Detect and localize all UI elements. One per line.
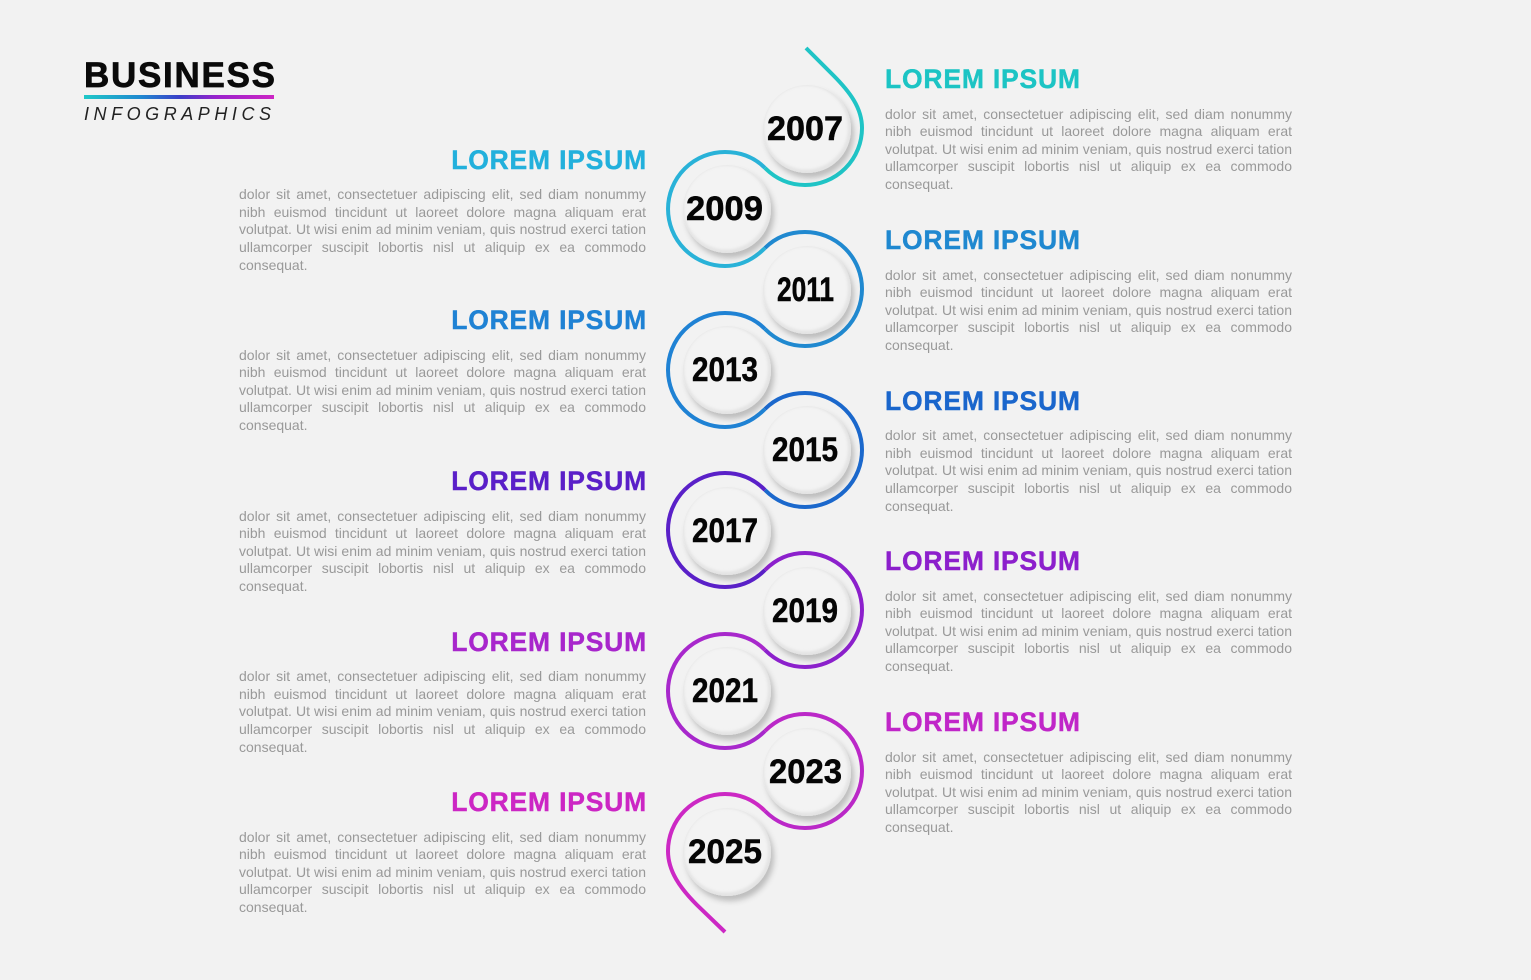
description: consequat. bbox=[239, 417, 308, 433]
description: ullamcorper suscipit lobortis nisl ut aliquip ex ea commodo bbox=[885, 640, 1292, 656]
year node 2017 bbox=[683, 487, 771, 575]
description bbox=[885, 588, 1292, 674]
description: dolor sit amet, consectetuer adipiscing elit, sed diam nonummy bbox=[239, 828, 646, 844]
year node 2013 bbox=[683, 326, 771, 414]
text block: 2019 bbox=[885, 546, 1292, 674]
year node 2009 bbox=[683, 165, 771, 253]
description: volutpat. Ut wisi enim ad minim veniam, quis nostrud exerci tation bbox=[239, 221, 646, 237]
description: volutpat. Ut wisi enim ad minim veniam, quis nostrud exerci tation bbox=[885, 462, 1292, 478]
description: dolor sit amet, consectetuer adipiscing elit, sed diam nonummy bbox=[885, 427, 1292, 443]
description: consequat. bbox=[885, 337, 954, 353]
description: volutpat. Ut wisi enim ad minim veniam, quis nostrud exerci tation bbox=[239, 703, 646, 719]
year node 2025 bbox=[683, 808, 771, 896]
description: volutpat. Ut wisi enim ad minim veniam, quis nostrud exerci tation bbox=[239, 543, 646, 559]
text block: 2023 bbox=[885, 707, 1292, 835]
description: nibh euismod tincidunt ut laoreet dolore magna aliquam erat bbox=[885, 605, 1292, 621]
heading: LOREM IPSUM bbox=[451, 787, 647, 817]
text block: 2015 bbox=[885, 386, 1292, 514]
description: consequat. bbox=[239, 578, 308, 594]
year node 2021 bbox=[683, 647, 771, 735]
text block: 2009 bbox=[239, 144, 647, 273]
description: nibh euismod tincidunt ut laoreet dolore magna aliquam erat bbox=[239, 525, 646, 541]
description: ullamcorper suscipit lobortis nisl ut aliquip ex ea commodo bbox=[239, 881, 646, 897]
description: nibh euismod tincidunt ut laoreet dolore magna aliquam erat bbox=[239, 686, 646, 702]
heading: LOREM IPSUM bbox=[451, 305, 647, 335]
description: nibh euismod tincidunt ut laoreet dolore magna aliquam erat bbox=[239, 846, 646, 862]
description bbox=[239, 828, 646, 915]
year node 2015: 2015 bbox=[772, 431, 838, 469]
description: volutpat. Ut wisi enim ad minim veniam, quis nostrud exerci tation bbox=[885, 141, 1292, 157]
winding timeline line bbox=[668, 48, 862, 932]
text block: 2007 bbox=[885, 64, 1292, 192]
description: ullamcorper suscipit lobortis nisl ut aliquip ex ea commodo bbox=[239, 560, 646, 576]
heading: LOREM IPSUM bbox=[885, 546, 1081, 576]
heading: LOREM IPSUM bbox=[451, 626, 647, 656]
description: ullamcorper suscipit lobortis nisl ut aliquip ex ea commodo bbox=[239, 239, 646, 255]
description: consequat. bbox=[239, 739, 308, 755]
description: dolor sit amet, consectetuer adipiscing elit, sed diam nonummy bbox=[885, 266, 1292, 282]
description: ullamcorper suscipit lobortis nisl ut aliquip ex ea commodo bbox=[885, 480, 1292, 496]
heading: LOREM IPSUM bbox=[451, 466, 647, 496]
description: consequat. bbox=[885, 819, 954, 835]
description: volutpat. Ut wisi enim ad minim veniam, quis nostrud exerci tation bbox=[239, 382, 646, 398]
description: consequat. bbox=[239, 257, 308, 273]
year node 2009: 2009 bbox=[686, 190, 763, 228]
text block: 2013 bbox=[239, 305, 647, 433]
description bbox=[239, 346, 646, 433]
description: dolor sit amet, consectetuer adipiscing elit, sed diam nonummy bbox=[239, 346, 646, 362]
description: nibh euismod tincidunt ut laoreet dolore magna aliquam erat bbox=[885, 123, 1292, 139]
description: volutpat. Ut wisi enim ad minim veniam, quis nostrud exerci tation bbox=[885, 623, 1292, 639]
year node 2017: 2017 bbox=[692, 512, 758, 550]
text block: 2021 bbox=[239, 626, 647, 755]
heading: LOREM IPSUM bbox=[885, 225, 1081, 255]
year node 2007 bbox=[763, 85, 851, 173]
text block: 2025 bbox=[239, 787, 647, 915]
description: consequat. bbox=[239, 899, 308, 915]
title: business: BUSINESS bbox=[84, 56, 275, 95]
description bbox=[885, 106, 1292, 192]
year node 2019 bbox=[763, 567, 851, 655]
description bbox=[885, 748, 1292, 835]
description: ullamcorper suscipit lobortis nisl ut aliquip ex ea commodo bbox=[885, 319, 1292, 335]
description: ullamcorper suscipit lobortis nisl ut aliquip ex ea commodo bbox=[239, 399, 646, 415]
heading: LOREM IPSUM bbox=[885, 64, 1081, 94]
description: volutpat. Ut wisi enim ad minim veniam, quis nostrud exerci tation bbox=[885, 302, 1292, 318]
description: nibh euismod tincidunt ut laoreet dolore magna aliquam erat bbox=[885, 445, 1292, 461]
year node 2013: 2013 bbox=[692, 351, 758, 389]
title block bbox=[84, 56, 275, 124]
text block: 2011 bbox=[885, 225, 1292, 353]
description: consequat. bbox=[885, 176, 954, 192]
description: dolor sit amet, consectetuer adipiscing elit, sed diam nonummy bbox=[239, 186, 646, 202]
description: dolor sit amet, consectetuer adipiscing elit, sed diam nonummy bbox=[885, 106, 1292, 122]
description: dolor sit amet, consectetuer adipiscing elit, sed diam nonummy bbox=[239, 668, 646, 684]
year node 2025: 2025 bbox=[688, 833, 762, 871]
description bbox=[239, 508, 646, 594]
year node 2011 bbox=[763, 246, 851, 334]
description bbox=[885, 427, 1292, 514]
description: nibh euismod tincidunt ut laoreet dolore magna aliquam erat bbox=[239, 204, 646, 220]
year node 2011: 2011 bbox=[777, 271, 834, 309]
heading: LOREM IPSUM bbox=[451, 144, 647, 174]
description: dolor sit amet, consectetuer adipiscing elit, sed diam nonummy bbox=[239, 508, 646, 524]
description: ullamcorper suscipit lobortis nisl ut aliquip ex ea commodo bbox=[885, 158, 1292, 174]
description: consequat. bbox=[885, 498, 954, 514]
subtitle: infographics: INFOGRAPHICS bbox=[84, 104, 271, 124]
year node 2021: 2021 bbox=[692, 672, 758, 710]
year node 2007: 2007 bbox=[767, 110, 843, 148]
text block: 2017 bbox=[239, 466, 647, 594]
year node 2023 bbox=[763, 728, 851, 816]
description: nibh euismod tincidunt ut laoreet dolore magna aliquam erat bbox=[239, 364, 646, 380]
year node 2015 bbox=[763, 406, 851, 494]
year node 2019: 2019 bbox=[772, 592, 838, 630]
heading: LOREM IPSUM bbox=[885, 386, 1081, 416]
description: nibh euismod tincidunt ut laoreet dolore magna aliquam erat bbox=[885, 766, 1292, 782]
description: volutpat. Ut wisi enim ad minim veniam, quis nostrud exerci tation bbox=[239, 864, 646, 880]
description bbox=[885, 266, 1292, 353]
description: consequat. bbox=[885, 658, 954, 674]
heading: LOREM IPSUM bbox=[885, 707, 1081, 737]
description: ullamcorper suscipit lobortis nisl ut aliquip ex ea commodo bbox=[885, 801, 1292, 817]
description bbox=[239, 668, 646, 755]
year node 2023: 2023 bbox=[769, 753, 842, 791]
title underline bbox=[84, 95, 274, 99]
description: dolor sit amet, consectetuer adipiscing elit, sed diam nonummy bbox=[885, 588, 1292, 604]
description: volutpat. Ut wisi enim ad minim veniam, quis nostrud exerci tation bbox=[885, 784, 1292, 800]
description: dolor sit amet, consectetuer adipiscing elit, sed diam nonummy bbox=[885, 748, 1292, 764]
description bbox=[239, 186, 646, 273]
description: ullamcorper suscipit lobortis nisl ut aliquip ex ea commodo bbox=[239, 721, 646, 737]
description: nibh euismod tincidunt ut laoreet dolore magna aliquam erat bbox=[885, 284, 1292, 300]
